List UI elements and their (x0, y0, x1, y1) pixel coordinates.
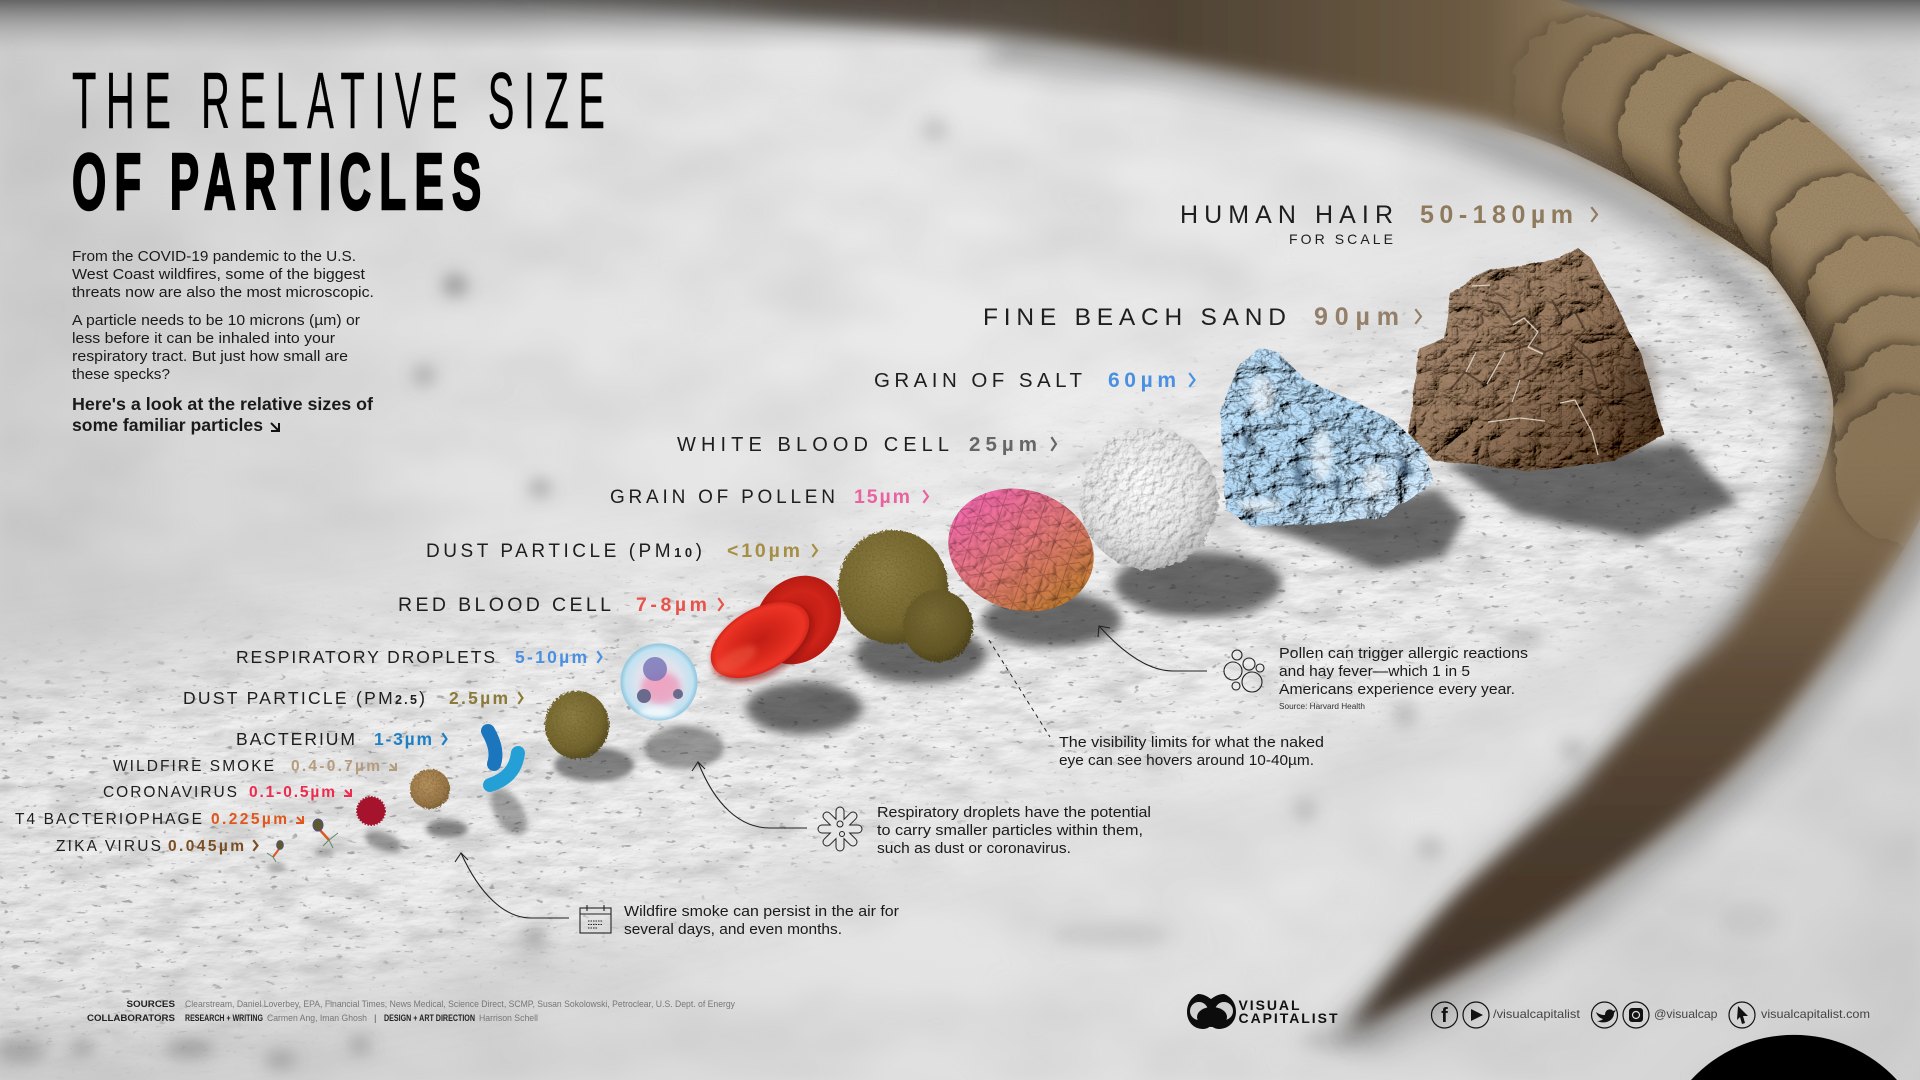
icon: pollen bubbles (1224, 650, 1264, 692)
title: THE RELATIVE SIZE (72, 57, 605, 146)
callout: wildfire smoke: several days, and even months. (624, 921, 842, 938)
label: red blood cell: RED BLOOD CELL (398, 594, 611, 616)
arrow: pollen callout (1098, 626, 1207, 671)
footer: sources and collaborators: | (374, 1013, 376, 1024)
footer: sources and collaborators: Carmen Ang, Iman Ghosh (267, 1013, 367, 1024)
callout: wildfire smoke: Wildfire smoke can persist in the air for (624, 903, 899, 920)
label: zika virus: 0.045µm (168, 838, 244, 855)
label: bacterium (236, 729, 446, 749)
label: grain of salt: GRAIN OF SALT (874, 369, 1082, 392)
label: red blood cell (398, 594, 723, 616)
intro text block: A particle needs to be 10 microns (µm) or (72, 312, 360, 329)
particle: respiratory droplet (621, 644, 697, 720)
label: wildfire smoke (113, 758, 396, 775)
label: coronavirus: 0.1-0.5µm (249, 784, 335, 801)
particle: bacterium (488, 731, 518, 785)
label: fine beach sand: 90µm (1314, 303, 1399, 331)
footer: sources and collaborators: DESIGN + ART DIRECTION (384, 1013, 475, 1024)
footer: sources and collaborators: SOURCES (126, 999, 175, 1010)
intro text block: From the COVID-19 pandemic to the U.S. (72, 248, 356, 265)
intro text block: less before it can be inhaled into your (72, 330, 335, 347)
label: grain of salt: 60µm (1108, 369, 1176, 392)
intro text block: Here's a look at the relative sizes of (72, 394, 373, 414)
social links: visualcapitalist.com (1761, 1007, 1870, 1021)
logo: Visual Capitalist: VISUAL (1238, 997, 1300, 1013)
label: white blood cell: 25µm (969, 433, 1037, 456)
title (72, 57, 605, 226)
icon: virus (822, 811, 858, 847)
label: coronavirus: CORONAVIRUS (103, 784, 237, 801)
intro text block: threats now are also the most microscopic. (72, 284, 374, 301)
particle: white blood cell (1080, 428, 1218, 570)
label: red blood cell: 7-8µm (636, 594, 707, 616)
label: grain of pollen: GRAIN OF POLLEN (610, 487, 835, 508)
label: white blood cell (677, 433, 1056, 456)
arrow: wildfire smoke callout (455, 853, 569, 918)
particle: zika virus (267, 840, 284, 862)
particle: T4 bacteriophage (313, 819, 338, 848)
label: wildfire smoke: WILDFIRE SMOKE (113, 758, 274, 775)
intro text block: West Coast wildfires, some of the biggest (72, 266, 366, 283)
label: human hair (1180, 201, 1597, 247)
human hair (500, 0, 1920, 1040)
callout: pollen: Source: Harvard Health (1279, 702, 1365, 711)
callout: pollen: and hay fever—which 1 in 5 (1279, 663, 1470, 680)
label: bacterium: BACTERIUM (236, 729, 355, 749)
logo: Visual Capitalist: CAPITALIST (1238, 1010, 1338, 1026)
social links: f (1441, 1005, 1448, 1027)
social links: @visualcap (1654, 1007, 1718, 1021)
callout: respiratory droplets (877, 804, 1151, 857)
label: dust particle PM10: DUST PARTICLE (PM 10) (426, 541, 702, 562)
label: grain of pollen (610, 486, 928, 508)
particle: red blood cells (698, 558, 859, 699)
label: zika virus (56, 838, 258, 855)
callout: visibility limits (1059, 734, 1324, 769)
intro text block: some familiar particles (72, 415, 263, 435)
intro text block (72, 248, 374, 435)
label: T4 bacteriophage: 0.225µm (211, 811, 287, 828)
dashed line: visibility limit (989, 640, 1050, 737)
particle: fine beach sand (1408, 247, 1663, 470)
label: coronavirus (103, 784, 351, 801)
arrow: respiratory droplets callout (692, 762, 807, 828)
particle: dust PM10 (838, 530, 973, 662)
label: respiratory droplets: RESPIRATORY DROPLETS (236, 647, 495, 667)
particle shadows (266, 443, 1738, 871)
black semicircle corner mark (1691, 1035, 1897, 1080)
callout: respiratory droplets: Respiratory droplets have the potential (877, 804, 1151, 821)
particle: grain of salt (1220, 348, 1434, 527)
label: bacterium: 1-3µm (374, 729, 432, 749)
label: fine beach sand: FINE BEACH SAND (983, 304, 1286, 331)
label: dust particle PM2.5: 2.5µm (449, 688, 508, 708)
particle: coronavirus (357, 797, 385, 825)
label: grain of pollen: 15µm (854, 486, 910, 508)
label: T4 bacteriophage (15, 811, 303, 828)
social links: /visualcapitalist (1493, 1007, 1581, 1021)
footer: sources and collaborators: Clearstream, Daniel Loverbey, EPA, Financial Times, News Medical, Science Direct, SCMP, Susan Sokolowski, Petroclear, U.S. Dept. of Energy (185, 999, 735, 1010)
icon: calendar (580, 905, 611, 933)
footer: sources and collaborators (87, 999, 735, 1024)
particle: wildfire smoke (410, 769, 450, 809)
social links (1432, 1002, 1870, 1028)
callout: pollen: Pollen can trigger allergic reactions (1279, 645, 1528, 662)
label: human hair: FOR SCALE (1289, 231, 1393, 247)
callout: wildfire smoke (624, 903, 899, 938)
label: T4 bacteriophage: T4 BACTERIOPHAGE (15, 811, 202, 828)
callout: respiratory droplets: to carry smaller particles within them, (877, 822, 1143, 839)
particle: pollen (932, 470, 1110, 630)
callout: visibility limits: eye can see hovers around 10-40µm. (1059, 752, 1314, 769)
footer: sources and collaborators: Harrison Schell (479, 1013, 538, 1024)
footer: sources and collaborators: COLLABORATORS (87, 1013, 175, 1024)
label: wildfire smoke: 0.4-0.7µm (291, 758, 380, 775)
callout: pollen (1279, 645, 1528, 711)
callout: visibility limits: The visibility limits for what the naked (1059, 734, 1324, 751)
intro text block: these specks? (72, 366, 170, 383)
label: human hair: 50-180µm (1420, 201, 1573, 229)
intro text block: respiratory tract. But just how small are (72, 348, 348, 365)
footer: sources and collaborators: RESEARCH + WRITING (185, 1013, 263, 1024)
label: dust particle PM10 (426, 540, 817, 562)
label: white blood cell: WHITE BLOOD CELL (677, 434, 949, 456)
callout: respiratory droplets: such as dust or coronavirus. (877, 840, 1071, 857)
particle: dust PM2.5 (545, 691, 609, 759)
label: dust particle PM10: <10µm (727, 540, 800, 562)
label: grain of salt (874, 369, 1194, 392)
label: dust particle PM2.5: DUST PARTICLE (PM2.5) (183, 688, 425, 708)
logo: Visual Capitalist (1187, 994, 1338, 1029)
label: respiratory droplets: 5-10µm (515, 647, 587, 667)
title: OF PARTICLES (72, 137, 481, 226)
callout: pollen: Americans experience every year. (1279, 681, 1515, 698)
label: fine beach sand (983, 303, 1421, 331)
label: zika virus: ZIKA VIRUS (56, 838, 161, 855)
label: human hair: HUMAN HAIR (1180, 201, 1393, 229)
